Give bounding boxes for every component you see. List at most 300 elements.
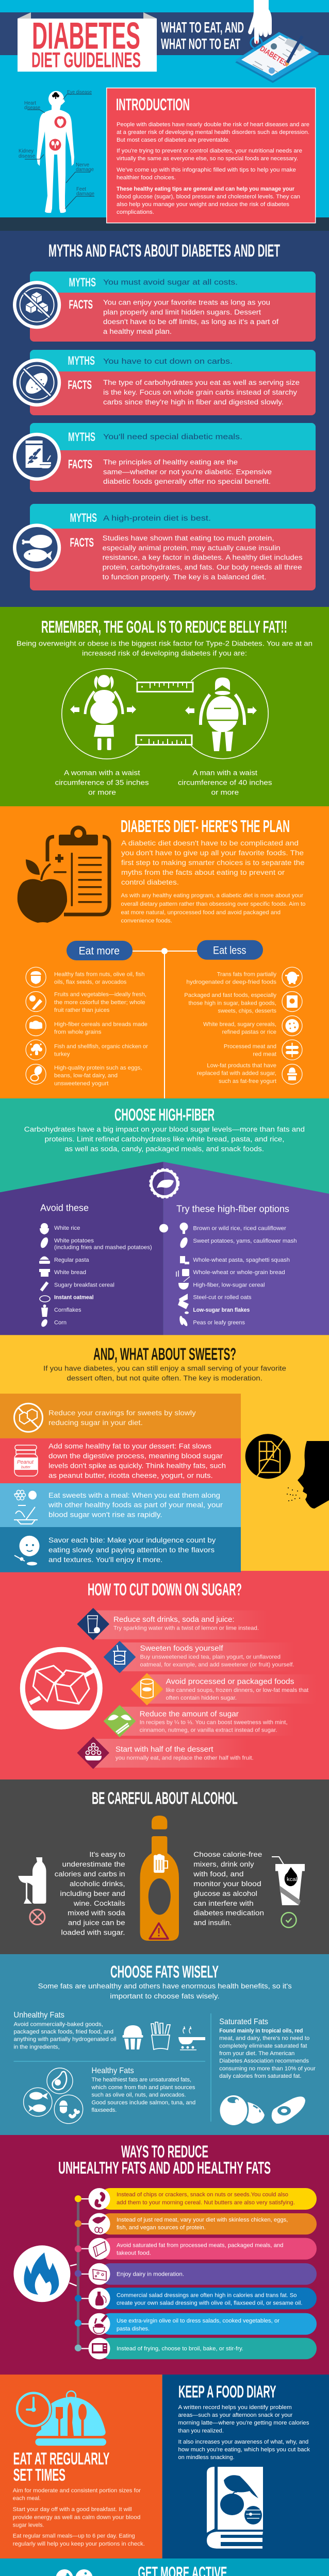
title banner bbox=[18, 12, 157, 72]
icon: face silhouette bbox=[287, 1441, 329, 1509]
icon: chicken and fish bbox=[13, 523, 61, 572]
list: high-fiber options: Whole-wheat or whole-grain bread bbox=[193, 1269, 285, 1276]
icon: food diary book bbox=[207, 2467, 263, 2549]
list: avoid these: (including fries and mashed potatoes) bbox=[54, 1245, 152, 1251]
row: sweets with a meal: with other healthy foods as part of your meal, your bbox=[48, 1500, 223, 1509]
text: woman waist caption: or more bbox=[88, 788, 116, 796]
icon: cup with kcal flame and check: kcal bbox=[287, 1877, 297, 1883]
icons: healthy food circles bbox=[24, 2068, 83, 2124]
card: special meals myth: MYTHS bbox=[68, 430, 95, 444]
text: carbohydrates intro bbox=[24, 1125, 305, 1153]
body labels: Eye disease bbox=[67, 89, 92, 95]
card: high protein myth: FACTS bbox=[70, 536, 94, 550]
heading: ways to reduce bbox=[58, 2142, 271, 2178]
list: eat less items: refined pastas or rice bbox=[222, 1029, 276, 1035]
text: plan paragraph one: A diabetic diet doesn't have to be complicated and bbox=[121, 839, 299, 847]
pill: olive oil: Use extra-virgin olive oil to dress salads, cooked vegetables, or bbox=[117, 2318, 279, 2324]
text: plan paragraph two: eat more natural, unprocessed food and avoid packaged and bbox=[121, 909, 281, 916]
icon: cup with kcal flame and check bbox=[272, 1857, 305, 1927]
list: avoid these bbox=[54, 1225, 152, 1326]
item: reduce soft drinks: Reduce soft drinks, soda and juice: bbox=[113, 1616, 235, 1624]
text: introduction body: at a greater risk of developing mental health disorders such as depression. bbox=[117, 129, 309, 135]
card: carbs myth: is the key. Focus on whole grain carbs instead of starchy bbox=[103, 388, 297, 396]
heading: eat at regularly set times bbox=[13, 2449, 109, 2485]
subtitle: WHAT NOT TO EAT bbox=[161, 36, 240, 53]
item: reduce amount of sugar: cinnamon, nutmeg, or vanilla extract instead of sugar. bbox=[140, 1727, 277, 1734]
list: high-fiber options: Brown or wild rice, riced cauliflower bbox=[193, 1225, 286, 1231]
pill: olive oil bbox=[75, 2313, 317, 2335]
item: avoid processed foods: like canned soups, frozen dinners, or low-fat meals that bbox=[166, 1687, 308, 1693]
timeline line bbox=[77, 2199, 99, 2348]
row: sweets with a meal: Eat sweets with a meal: When you eat them along bbox=[48, 1491, 220, 1499]
list: eat more items: High-fiber cereals and breads made bbox=[54, 1021, 147, 1027]
item: sweeten foods yourself: Buy unsweetened iced tea, plain yogurt, or unflavored bbox=[140, 1654, 281, 1660]
card: special meals myth: The principles of healthy eating are the bbox=[103, 459, 238, 466]
list: eat less items: White bread, sugary cereals, bbox=[203, 1021, 276, 1027]
text: regular meals: sugar levels. bbox=[13, 2522, 44, 2528]
body labels: damage bbox=[76, 166, 94, 173]
text: alcohol left: It's easy to bbox=[89, 1851, 125, 1858]
text: woman waist caption: A woman with a waist bbox=[64, 769, 140, 777]
card: high protein myth: MYTHS bbox=[70, 511, 97, 525]
text: woman waist caption: circumference of 35 inches bbox=[55, 779, 149, 786]
text: alcohol left: wine. Cocktails bbox=[73, 1900, 125, 1907]
text: plan paragraph two: convenience foods. bbox=[121, 918, 172, 924]
panel: reduce belly fat bbox=[0, 607, 329, 806]
icons: eat less bbox=[282, 967, 302, 1084]
text: fats intro: important to choose fats wisely. bbox=[110, 1992, 220, 2000]
body labels: damage bbox=[76, 191, 94, 197]
list: eat less items: Trans fats from partially bbox=[217, 971, 276, 977]
icons: high-fiber list bbox=[176, 1223, 190, 1327]
card: high protein myth: resistance, a key factor in diabetes. A healthy diet includes bbox=[103, 553, 303, 562]
heading: eat at regularly set times: EAT AT REGULARLY bbox=[13, 2449, 109, 2468]
list: avoid these: Instant oatmeal bbox=[54, 1295, 94, 1301]
pill: snack on nuts: Instead of chips or crackers, snack on nuts or seeds.You could also bbox=[117, 2192, 288, 2198]
row: savor each bite bbox=[0, 1527, 241, 1572]
text: fats intro: Some fats are unhealthy and others have enormous health benefits, so it's bbox=[38, 1982, 292, 1990]
body labels: Nerve bbox=[76, 162, 89, 168]
panel: diabetes diet plan bbox=[0, 806, 329, 1098]
card: high protein myth: especially animal protein, may actually cause insulin bbox=[103, 544, 281, 552]
pill: salad dressings: Commercial salad dressings are often high in calories and trans fat. So bbox=[117, 2292, 297, 2298]
icons: cupcake fries and pan bbox=[123, 2022, 205, 2050]
text: introduction body: blood glucose (sugar), blood pressure and cholesterol levels. They can bbox=[117, 194, 300, 200]
text: plan paragraph one: first step to making smarter choices is to separate the bbox=[121, 859, 304, 867]
text: alcohol right: glucose as alcohol bbox=[193, 1890, 257, 1897]
card: sugar myth: You must avoid sugar at all costs. bbox=[103, 278, 238, 286]
icon: peanut butter jar bbox=[14, 1445, 38, 1476]
text: plan paragraph one: control diabetes. bbox=[121, 878, 179, 886]
pill: eat more bbox=[67, 941, 133, 960]
text: food diary: A written record helps you identify problem bbox=[178, 2404, 292, 2411]
list: high-fiber options: High-fiber, low-sugar cereal bbox=[193, 1282, 265, 1289]
row: reduce cravings bbox=[0, 1394, 241, 1438]
heading: avoid these: Avoid these bbox=[40, 1202, 89, 1213]
text: carbohydrates intro: proteins. Limit refined carbohydrates like white bread, pasta, and rice, bbox=[45, 1136, 284, 1143]
title banner: DIET GUIDELINES bbox=[31, 48, 141, 72]
pill: dairy bbox=[75, 2263, 317, 2285]
panel: sweets bbox=[0, 1335, 329, 1572]
text: alcohol right: mixers, drink only bbox=[193, 1860, 254, 1868]
item: reduce soft drinks: Try sparkling water with a twist of lemon or lime instead. bbox=[113, 1625, 259, 1631]
item: half of the dessert: you normally eat, and replace the other half with fruit. bbox=[116, 1755, 254, 1761]
text: introduction body: complications. bbox=[117, 209, 154, 215]
row: healthy fat: as peanut butter, ricotta cheese, yogurt, or nuts. bbox=[48, 1471, 213, 1480]
icons: eat more bbox=[26, 967, 46, 1084]
text: alcohol left: and juice can be bbox=[68, 1919, 125, 1927]
card: sugar myth: MYTHS bbox=[69, 276, 96, 290]
heading: fats wisely: CHOOSE FATS WISELY bbox=[110, 1962, 219, 1981]
text: introduction body bbox=[117, 122, 309, 215]
text: alcohol left: mixed with soda bbox=[68, 1909, 125, 1917]
card: carbs myth: You have to cut down on carbs. bbox=[103, 357, 233, 366]
heading: choose high-fiber: CHOOSE HIGH-FIBER bbox=[114, 1106, 215, 1125]
card: special meals myth: FACTS bbox=[68, 457, 92, 471]
list: eat more items: fruit rather than juices bbox=[54, 1007, 110, 1013]
text: sweets intro: dessert often, but not quite often. The key is moderation. bbox=[67, 1375, 262, 1382]
card: high protein myth: A high-protein diet is best. bbox=[103, 514, 211, 522]
list: avoid these: Sugary breakfast cereal bbox=[54, 1282, 114, 1289]
text: regular meals: provide energy as well as calm down your blood bbox=[13, 2514, 140, 2520]
list: eat less items: Packaged and fast foods, especially bbox=[184, 992, 276, 998]
icon: peanut butter jar: Peanut bbox=[17, 1460, 34, 1465]
text: introduction body: also help you manage your weight and reduce the risk of diabetes bbox=[117, 201, 290, 208]
text: introduction body: People with diabetes have nearly double the risk of heart diseases and are bbox=[117, 122, 309, 128]
icon: peanut butter jar: butter bbox=[21, 1466, 31, 1469]
body labels: disease bbox=[24, 105, 40, 111]
block: healthy fats: Healthy Fats bbox=[92, 2066, 134, 2075]
icon: grapes apple and plate bbox=[14, 1490, 38, 1524]
card: carbs myth bbox=[13, 350, 316, 415]
list: avoid these: White bread bbox=[54, 1269, 86, 1276]
item: sweeten foods yourself bbox=[104, 1641, 295, 1672]
block: saturated fats: completely eliminate saturated fat bbox=[219, 2043, 307, 2049]
panel: introduction bbox=[107, 88, 316, 223]
item: avoid processed foods: Avoid processed or packaged foods bbox=[166, 1678, 294, 1686]
panel: choose high-fiber bbox=[0, 1098, 329, 1335]
list: high-fiber options: Low-sugar bran flakes bbox=[193, 1307, 250, 1313]
list: eat less items: those high in sugar, baked goods, bbox=[189, 1000, 276, 1006]
text: man waist caption: A man with a waist bbox=[193, 769, 257, 777]
icon: no sugar cubes bbox=[13, 281, 61, 329]
block: unhealthy fats: Unhealthy Fats bbox=[13, 2011, 64, 2020]
card: high protein myth: Studies have shown that eating too much protein, bbox=[103, 534, 274, 542]
row: healthy fat bbox=[0, 1438, 241, 1483]
block: saturated fats: from your diet. The American bbox=[219, 2050, 294, 2057]
list: eat more items: Fish and shellfish, organic chicken or bbox=[54, 1044, 148, 1050]
pill: broil bake stir-fry: Instead of frying, choose to broil, bake, or stir-fry. bbox=[117, 2346, 243, 2352]
icon: warning bottle bbox=[140, 1816, 179, 1941]
icon: cloche and clock bbox=[15, 2391, 106, 2446]
list: avoid these: Regular pasta bbox=[54, 1257, 89, 1263]
icon: hand pricking finger bbox=[248, 0, 272, 48]
pill: salad dressings bbox=[75, 2287, 317, 2309]
pill: snack on nuts: add them to your morning cereal. Nut butters are also very satisfying. bbox=[117, 2199, 295, 2206]
text: regular meals: regularly will help you keep your portions in check. bbox=[13, 2541, 145, 2547]
item: reduce amount of sugar: In recipes by ¼ to ⅓. You can boost sweetness with mint, bbox=[140, 1720, 288, 1726]
card: high protein myth: protein, carbohydrates, and fats. Our body needs all three bbox=[103, 564, 302, 571]
text: belly fat intro bbox=[17, 640, 312, 657]
panel: eat at regularly set times bbox=[0, 2375, 162, 2558]
block: saturated fats: Found mainly in tropical oils, red bbox=[219, 2028, 303, 2034]
text: introduction body: We've come up with this infographic filled with tips to help you make bbox=[117, 167, 296, 173]
row: sweets with a meal bbox=[0, 1483, 241, 1527]
text: sweets intro bbox=[43, 1364, 286, 1382]
card: carbs myth: carbs since they're high in fiber and digested slowly. bbox=[103, 398, 284, 406]
block: unhealthy fats: packaged snack foods, fried food, and bbox=[13, 2029, 113, 2035]
item: half of the dessert bbox=[78, 1737, 254, 1768]
list: eat less items: replaced fat with added sugar, bbox=[197, 1071, 276, 1077]
list: eat more items: oils, flax seeds, or avocados bbox=[54, 979, 127, 985]
icons: avoid list bbox=[39, 1223, 50, 1328]
text: plan paragraph two bbox=[121, 893, 305, 924]
list: high-fiber options: Peas or leafy greens bbox=[193, 1319, 245, 1326]
block: saturated fats: Saturated Fats bbox=[219, 2018, 268, 2026]
panel: myths and facts bbox=[0, 231, 329, 607]
text: food diary: It also increases your awareness of what, why, and bbox=[178, 2439, 308, 2445]
pill: eat less bbox=[197, 940, 263, 960]
text: alcohol left: underestimate the bbox=[62, 1860, 125, 1868]
heading: try these high-fiber options: Try these high-fiber options bbox=[176, 1204, 289, 1214]
pill: olive oil: pasta dishes. bbox=[117, 2326, 150, 2332]
text: alcohol right: and insulin. bbox=[193, 1919, 232, 1927]
pill: broil bake stir-fry bbox=[75, 2338, 317, 2360]
list: eat more items: beans, low-fat dairy, and bbox=[54, 1073, 118, 1079]
panel: header and introduction bbox=[0, 0, 329, 231]
list: high-fiber options: Whole-wheat pasta, spaghetti squash bbox=[193, 1257, 290, 1263]
item: sweeten foods yourself: Sweeten foods yourself bbox=[140, 1645, 224, 1653]
text: regular meals: Aim for moderate and consistent portion sizes for bbox=[13, 2487, 141, 2494]
card: special meals myth: same—whether or not you're diabetic. Expensive bbox=[103, 468, 272, 476]
card: special meals myth: You'll need special diabetic meals. bbox=[103, 433, 242, 441]
text: alcohol right: diabetes medication bbox=[193, 1909, 264, 1917]
text: man waist caption: circumference of 40 inches bbox=[178, 779, 272, 786]
pill: dairy: Enjoy dairy in moderation. bbox=[117, 2272, 184, 2278]
block: healthy fats bbox=[91, 2066, 195, 2113]
list: eat more items: the more colorful the better; whole bbox=[54, 999, 145, 1006]
text: plan paragraph one: myths from the facts about eating to prevent or bbox=[121, 869, 285, 876]
row: healthy fat: down the digestive process, meaning blood sugar bbox=[48, 1452, 223, 1460]
text: introduction body: healthier food choices. bbox=[117, 175, 176, 181]
text: carbohydrates intro: as well as soda, candy, packaged meals, and snack foods. bbox=[64, 1145, 264, 1153]
icon: cereal box and bowl bbox=[13, 433, 61, 481]
block: saturated fats bbox=[219, 2018, 316, 2079]
text: alcohol right bbox=[193, 1851, 264, 1927]
block: unhealthy fats: in the ingredients, bbox=[13, 2044, 60, 2050]
body labels: Feet bbox=[76, 186, 86, 192]
text: introduction body: But most cases of diabetes are preventable. bbox=[117, 137, 230, 143]
card: sugar myth bbox=[13, 272, 316, 342]
text: food diary bbox=[178, 2404, 310, 2461]
list: eat less items: such as fat-free yogurt bbox=[219, 1078, 277, 1084]
card: sugar myth: You can enjoy your favorite treats as long as you bbox=[103, 299, 270, 306]
row: savor each bite: eating slowly and paying attention to the flavors bbox=[48, 1546, 215, 1554]
pill: salad dressings: create your own salad dressing with olive oil, flaxseed oil, or sesame oil. bbox=[117, 2300, 302, 2307]
item: reduce amount of sugar bbox=[104, 1706, 295, 1737]
list: avoid these: White potatoes bbox=[54, 1238, 94, 1244]
body labels: Kidney bbox=[19, 148, 34, 154]
text: man waist caption bbox=[178, 769, 272, 796]
icon: flame bbox=[13, 2245, 77, 2302]
item: avoid processed foods bbox=[131, 1674, 317, 1705]
list: avoid these: Cornflakes bbox=[54, 1307, 81, 1313]
card: carbs myth: The type of carbohydrates you eat as well as serving size bbox=[103, 379, 300, 386]
block: unhealthy fats: anything with partially hydrogenated oil bbox=[13, 2037, 117, 2043]
icon: waist measurement diagram bbox=[62, 668, 268, 759]
text: alcohol left: loaded with sugar. bbox=[61, 1929, 125, 1936]
pill: snack on nuts bbox=[75, 2188, 317, 2210]
title banner: DIABETES bbox=[32, 15, 140, 57]
block: healthy fats: Good sources include salmon, tuna, and bbox=[92, 2099, 195, 2106]
pill: eat more: Eat more bbox=[79, 945, 120, 957]
pill: eat less: Eat less bbox=[213, 945, 246, 957]
text: introduction body: These healthy eating tips are general and can help you manage your bbox=[117, 186, 295, 192]
text: belly fat intro: Being overweight or obese is the biggest risk factor for Type-2 Diabetes. You are at an bbox=[17, 640, 312, 647]
list: high-fiber options: Steel-cut or rolled oats bbox=[193, 1295, 252, 1301]
item: half of the dessert: Start with half of the dessert bbox=[116, 1745, 213, 1754]
pill: saturated fat: Avoid saturated fat from processed meats, packaged meals, and bbox=[117, 2243, 284, 2249]
icon: no sugar large bbox=[23, 1650, 100, 1730]
heading: eat at regularly set times: SET TIMES bbox=[13, 2466, 65, 2485]
icon: top ruler bbox=[137, 682, 193, 691]
card: high protein myth bbox=[13, 504, 316, 590]
card: high protein myth: to function properly. The key is a balanced diet. bbox=[103, 573, 267, 581]
icon: no chocolate bbox=[245, 1434, 291, 1479]
heading: ways to reduce: WAYS TO REDUCE bbox=[121, 2142, 208, 2161]
icon: man figure bbox=[185, 677, 257, 751]
row: healthy fat: Add some healthy fat to your dessert: Fat slows bbox=[48, 1442, 211, 1450]
text: alcohol left: including beer and bbox=[60, 1890, 125, 1897]
block: saturated fats: daily calories from saturated fat. bbox=[219, 2073, 301, 2079]
block: healthy fats: such as olive oil, nuts, and avocados. bbox=[92, 2092, 186, 2098]
text: plan paragraph two: overall dietary pattern rather than obsessing over specific foods. Aim to bbox=[121, 901, 305, 907]
text: alcohol right: Choose calorie-free bbox=[193, 1851, 262, 1858]
row: reduce cravings: reducing sugar in your diet. bbox=[48, 1418, 143, 1427]
text: food diary: areas—such as your afternoon snack or your bbox=[178, 2412, 293, 2418]
icon: woman figure bbox=[70, 675, 136, 750]
text: fats intro bbox=[38, 1982, 292, 2000]
panel: alcohol bbox=[0, 1780, 329, 1954]
text: food diary: morning latte—where you're getting more calories bbox=[178, 2420, 309, 2426]
text: alcohol right: monitor your blood bbox=[193, 1880, 261, 1888]
list: eat less items: hydrogenated or deep-fried foods bbox=[186, 979, 276, 985]
text: alcohol left bbox=[55, 1851, 125, 1936]
subtitle: WHAT TO EAT, AND bbox=[161, 20, 244, 36]
icon: exercise circles and person bbox=[24, 2569, 124, 2576]
row: savor each bite: Savor each bite: Make your indulgence count by bbox=[48, 1536, 216, 1544]
block: healthy fats: flaxseeds. bbox=[92, 2107, 117, 2113]
list: eat more items: Healthy fats from nuts, olive oil, fish bbox=[54, 971, 144, 977]
icon: no sugar cubes outline bbox=[14, 1403, 42, 1432]
icon: leaf badge bbox=[150, 1169, 179, 1198]
text: alcohol right: with food, and bbox=[193, 1870, 243, 1878]
block: unhealthy fats bbox=[13, 2011, 117, 2050]
card: sugar myth: doesn't have to be off limits, as long as it's a part of bbox=[103, 318, 278, 326]
text: plan paragraph two: As with any healthy eating program, a diabetic diet is more about your bbox=[121, 893, 303, 899]
text: alcohol left: calories and carbs in bbox=[55, 1870, 125, 1878]
marker dot bbox=[159, 1224, 168, 1232]
panel: keep a food diary bbox=[162, 2375, 329, 2558]
icon: smiling face with spoon bbox=[14, 1536, 39, 1565]
pill: vary protein: fish, and vegan sources of protein. bbox=[117, 2225, 206, 2231]
text: carbohydrates intro: Carbohydrates have a big impact on your blood sugar levels—more than fats and bbox=[24, 1125, 305, 1133]
list: eat less items bbox=[184, 971, 277, 1084]
list: eat less items: Low-fat products that have bbox=[207, 1063, 276, 1069]
item: sweeten foods yourself: oatmeal, for example, and add sweetener (or fruit) yourself. bbox=[140, 1662, 294, 1668]
text: plan paragraph one bbox=[121, 839, 304, 886]
text: alcohol left: alcoholic drinks, bbox=[70, 1880, 125, 1888]
card: sugar myth: FACTS bbox=[69, 298, 93, 312]
panel: get more active bbox=[0, 2558, 329, 2576]
card: special meals myth: diabetic foods generally offer no special benefit. bbox=[103, 478, 271, 485]
panel: how to cut down on sugar bbox=[0, 1571, 329, 1780]
list: eat more items: unsweetened yogurt bbox=[54, 1080, 109, 1087]
text: food diary: on mindless snacking. bbox=[178, 2454, 235, 2461]
list: avoid these: Corn bbox=[54, 1319, 67, 1326]
item: reduce soft drinks bbox=[78, 1608, 268, 1639]
text: regular meals: each meal. bbox=[13, 2496, 41, 2502]
list: eat less items: Processed meat and bbox=[224, 1044, 276, 1050]
list: eat less items: sweets, chips, desserts bbox=[218, 1008, 276, 1014]
pill: saturated fat: takeout food. bbox=[117, 2250, 151, 2257]
body labels: Heart bbox=[24, 100, 36, 106]
text: alcohol right: can interfere with bbox=[193, 1900, 254, 1907]
row: sweets with a meal: blood sugar won't rise as rapidly. bbox=[48, 1511, 162, 1519]
block: saturated fats: Diabetes Association recommends bbox=[219, 2058, 309, 2064]
list: high-fiber options: Sweet potatoes, yams, cauliflower mash bbox=[193, 1238, 297, 1244]
list: eat more items: Fruits and vegetables—ideally fresh, bbox=[54, 992, 146, 998]
list: eat more items bbox=[54, 971, 148, 1087]
icon: no potato bbox=[13, 359, 61, 406]
icon: wine glass and bottle with cross bbox=[18, 1857, 46, 1925]
text: regular meals: Start your day off with a good breakfast. It will bbox=[13, 2506, 132, 2513]
block: saturated fats: meat, and dairy, there's no need to bbox=[219, 2036, 309, 2042]
text: introduction body: virtually the same as everyone else, so no special foods are necessary. bbox=[117, 156, 298, 162]
pill: vary protein bbox=[75, 2213, 317, 2235]
card: carbs myth: MYTHS bbox=[68, 354, 95, 368]
icons: coconut and steak bbox=[220, 2095, 305, 2125]
row: savor each bite: and textures. You'll enjoy it more. bbox=[48, 1555, 162, 1564]
list: high-fiber options bbox=[193, 1225, 297, 1326]
list: eat less items: red meat bbox=[253, 1052, 277, 1058]
pill: vary protein: Instead of just red meat, vary your diet with skinless chicken, eggs, bbox=[117, 2217, 288, 2223]
text: belly fat intro: increased risk of developing diabetes if you are: bbox=[82, 649, 247, 657]
block: healthy fats: which come from fish and plant sources bbox=[91, 2084, 195, 2091]
list: eat more items: turkey bbox=[54, 1052, 70, 1058]
text: man waist caption: or more bbox=[211, 788, 239, 796]
text: regular meals bbox=[13, 2487, 145, 2547]
panel: choose fats wisely bbox=[0, 1954, 329, 2135]
subtitle bbox=[161, 20, 244, 53]
card: special meals myth bbox=[13, 423, 316, 492]
icon: clipboard with diabetes report bbox=[235, 32, 319, 83]
list: eat more items: from whole grains bbox=[54, 1029, 102, 1035]
card: sugar myth: a healthy meal plan. bbox=[103, 328, 172, 335]
card: sugar myth: plan properly and limit hidden sugars. Dessert bbox=[103, 308, 261, 316]
block: healthy fats: The healthiest fats are unsaturated fats, bbox=[92, 2077, 191, 2083]
card: carbs myth: FACTS bbox=[68, 378, 92, 392]
body labels bbox=[19, 89, 94, 209]
panel: reduce unhealthy fats bbox=[0, 2135, 329, 2375]
item: avoid processed foods: often contain hidden sugar. bbox=[166, 1695, 237, 1701]
text: woman waist caption bbox=[55, 769, 149, 796]
row: healthy fat: levels don't spike as quickly. Think healthy fats, such bbox=[48, 1461, 226, 1469]
list: eat more items: High-quality protein such as eggs, bbox=[54, 1065, 142, 1071]
body labels: disease bbox=[19, 153, 35, 159]
icon: human body with disease sites bbox=[37, 91, 74, 213]
icon: clipboard with diabetes report: DIABETES bbox=[258, 44, 289, 68]
